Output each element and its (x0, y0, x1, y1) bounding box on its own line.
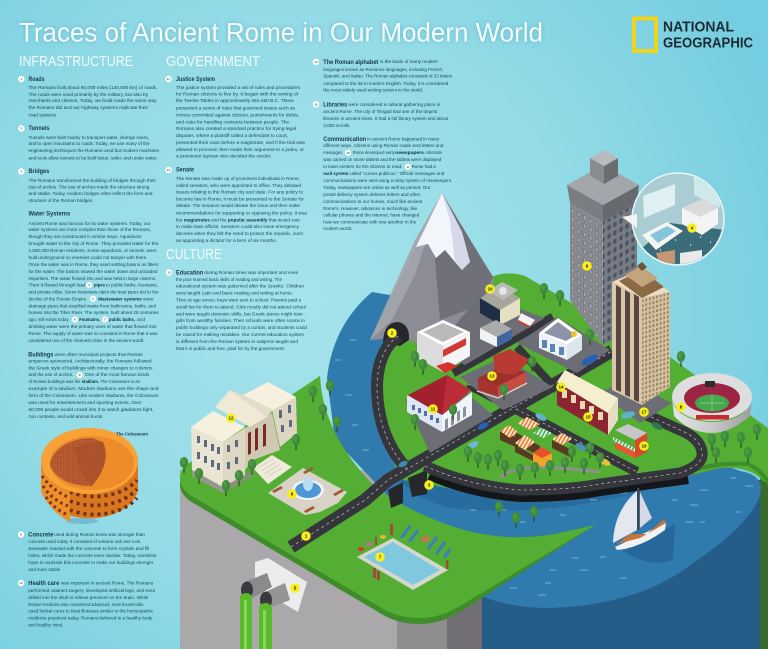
text block: buildings: zoo contests, and wild animal hunts. (28, 414, 104, 419)
text block: education: is different from the Roman system in subjects taught and (176, 339, 299, 344)
building: beige tower (612, 262, 670, 405)
text block: senate: the magistrates and the popular assembly that would vote (176, 218, 301, 222)
text block: justice system: presented a series of rules that governed issues such as (176, 106, 296, 110)
text block: senate: become law in Rome, it must be presented to the Senate for (176, 196, 305, 202)
market stalls (500, 417, 572, 467)
text block: bridges: use of arches. The use of arches made the structure strong (28, 184, 150, 190)
illustration: city map (180, 150, 768, 649)
text block: bridges (18, 168, 157, 203)
text block: water systems: drainage pipes that expelled waste from bathrooms, baths, and (28, 304, 157, 308)
logo: National Geographic (634, 18, 753, 52)
text block: communication: how we communicate with one another in the (323, 220, 417, 224)
label: The Colosseum: The Colosseum (116, 431, 148, 436)
text block: education: public buildings only separated by a curtain, and students could (176, 325, 308, 330)
text block: the Roman alphabet: is the basis of many modern (380, 59, 439, 64)
text block: water systems: considered one of the cleanest cities in the ancient world. (28, 338, 144, 343)
land: city island (380, 273, 768, 495)
illustration: stadium (672, 373, 752, 433)
building: capitol (191, 382, 297, 493)
text block: water systems: to public baths, fountains, (106, 282, 158, 288)
map pins: 17 (641, 410, 647, 415)
text block: communication: cellular phones and the Internet, have changed (323, 212, 420, 218)
tunnel (383, 322, 409, 346)
map pins: 8 (680, 405, 683, 410)
text block: senate: recommendations for supporting or opposing the policy. It was (176, 210, 308, 216)
text block: bridges: The Romans transformed the building of bridges through their (28, 178, 157, 183)
text block: water systems: public baths, (109, 317, 135, 322)
text block: concrete: and more stable. (28, 567, 61, 572)
text block: communication: communications to our homes, much like ancient (323, 199, 423, 204)
text block: concrete: Concrete (28, 532, 54, 539)
text block: communication: in ancient Rome happened in many (367, 136, 440, 142)
pool (357, 524, 450, 590)
text block: buildings: example of a stadium. Modern stadiums use the shape and (28, 386, 159, 391)
text block: communication: Rome's. However, advances in technology, like (323, 206, 418, 211)
text block: tunnels: Tunnels (28, 125, 50, 132)
panel: alphabet, libraries, communication (313, 59, 453, 231)
map pins: 4 (691, 226, 694, 231)
panel: infrastructure (18, 54, 160, 419)
text block: communication: Communication (323, 136, 366, 143)
text block: buildings: and the use of arches. (28, 372, 74, 377)
text block: water systems: impurities. The water flowed into and was held in large cisterns. (28, 276, 156, 281)
map pins: 10 (487, 287, 493, 292)
text block: education: educational system was patterned after the Greeks'. Children (176, 284, 305, 288)
text block: the Roman alphabet: 14 (314, 60, 318, 64)
text block: concrete: used during Roman times was stronger than (54, 532, 146, 537)
text block: water systems: and (137, 317, 146, 322)
text block: education: Education (176, 270, 203, 277)
text block: justice system: The justice system provided a set of rules and procedures (176, 85, 301, 90)
text block: communication (323, 136, 452, 231)
text block: communication: Information (426, 150, 442, 155)
text block: senate: The Senate was made up of prominent individuals in Rome, (176, 176, 300, 181)
text block: justice system: disputes, where a plaintiff called a defendant to court, (176, 133, 288, 138)
panel: culture (166, 247, 308, 351)
text block: education: during Roman times was important and even (204, 270, 299, 275)
text block: health care: performed cataract surgery, developed artificial legs, and even (28, 588, 156, 593)
text block: libraries (313, 101, 449, 128)
text block: health care: drilled into the skull to relieve pressure on the brain. While (28, 595, 149, 600)
text block: justice system: and rules for handling contracts between people. The (176, 120, 290, 124)
map pins: 12 (228, 416, 234, 421)
text block: libraries: were considered a cultural gathering place in (348, 102, 441, 107)
text block: justice system: Romans also created a standard practice for trying legal (176, 126, 296, 131)
text block: justice system: allowed to proceed, then made their argument to a judex, or (176, 147, 305, 152)
text block: buildings: Buildings (28, 351, 54, 358)
water shadow (392, 470, 690, 511)
text block: concrete: holes, which made the concrete even sturdier. Today, scientists (28, 553, 157, 558)
text block: justice system: a prominent layman who decided the verdict. (176, 154, 272, 158)
text block: justice system: 11 (167, 77, 170, 81)
text block: water systems: pipes (94, 282, 105, 288)
text block: bridges: structure of the Roman bridges. (28, 198, 94, 203)
text block: education: girls from wealthy families. Their schools were often rooms in (176, 318, 306, 323)
text block: water systems: decline of the Roman Empire. (28, 296, 88, 302)
icon: yellow rectangle (634, 18, 656, 51)
bridge piers (388, 470, 427, 508)
illustration: bathroom bubble (622, 173, 725, 270)
text block: health care: Health care (28, 580, 60, 587)
text block: roads: 1 (20, 77, 22, 81)
text block: senate: issues relating to the Roman city and state. For any policy to (176, 190, 304, 194)
text block: communication: modern world. (323, 226, 352, 231)
text block: communication: Rome had a (412, 164, 436, 169)
map pins: 1 (305, 534, 308, 539)
text block: the Roman alphabet: compared to the 26 in modern English. Today, it is considered (323, 81, 449, 86)
map pins: 14 (558, 385, 564, 390)
map pins: 15 (585, 415, 591, 420)
text block: communication: communications were sent using a relay system of messengers. (323, 178, 452, 183)
text block: roads: The roads were used primarily by the military, but also by (28, 92, 149, 97)
text block: water systems: Once the water was in Rome, they used settling basins as filters (28, 262, 159, 267)
text block: water systems: 7 (104, 318, 106, 322)
text block: health care: used herbal cures to treat illnesses similar to the homeopathic (28, 608, 154, 614)
map pins: 6 (291, 492, 294, 497)
building: bank (539, 318, 582, 360)
text block: education: and were taught domestic skills, but Greek slaves might tutor (176, 312, 304, 316)
land: front left (180, 376, 595, 624)
text block: bridges: and stable. Today, modern bridges often reflect the form and (28, 191, 153, 196)
water ripples (335, 340, 753, 595)
text block: the Roman alphabet (313, 59, 453, 92)
text block: water systems: and private villas. Some historians claim the lead pipes led to the (28, 290, 159, 294)
text block: libraries: 15 (314, 102, 318, 106)
text block: justice system: the Twelve Tables in approximately 451-450 B.C. These (176, 98, 295, 103)
map pins (226, 223, 697, 593)
text block: buildings: were often municipal projects that Roman (55, 352, 143, 357)
text block: health care: and healthy mind. (28, 622, 63, 628)
building: courthouse (407, 375, 472, 432)
text block: water systems: though they are constructed in similar ways. Aqueducts (28, 234, 142, 239)
text block: senate: debate. The senators would debate the issue and then make (176, 203, 300, 208)
text block: libraries: 3,000 scrolls. (323, 123, 350, 128)
text block: communication: different ways. Citizens using Roman roads sent letters and (323, 143, 444, 148)
text block: health care: 10 (19, 581, 23, 585)
text block: bridges: 3 (20, 170, 22, 174)
text block: water systems: Water Systems (28, 211, 71, 218)
text block: health care: was important in ancient Rome. The Romans (61, 580, 154, 585)
panel: government (165, 54, 308, 243)
text block: tunnels: 2 (20, 127, 22, 131)
text block: water systems: 6 (74, 318, 76, 322)
text block: education: small fee for them to attend. Girls mostly did not attend school (176, 304, 306, 310)
text block: senate (165, 167, 308, 243)
text block: water systems: ago, still exists today. (28, 317, 70, 322)
text block: water systems: 5 (92, 297, 94, 301)
map pins: 16 (641, 444, 647, 449)
text block: communication: Rome developed early (353, 150, 395, 155)
text block: communication: 16 (346, 151, 350, 155)
cars (397, 352, 664, 469)
text block: concrete (18, 531, 157, 572)
text block: roads: the Romans did and our highway systems replicate their (28, 105, 149, 110)
text block: roads: merchants and citizens. Today, we build roads the same way (28, 98, 157, 103)
map pins: 2 (391, 331, 394, 336)
text block: water systems: Rome. The supply of water was so constant in Rome that it was (28, 331, 158, 336)
text block: education (166, 269, 308, 351)
illustration: Colosseum (41, 428, 148, 524)
mountain (370, 193, 495, 345)
map pins: 13 (489, 374, 495, 379)
text block: water systems: drinking water were the primary uses of water that flowed into (28, 324, 157, 329)
text block: communication: messages. (323, 150, 343, 155)
building: fire station (417, 320, 470, 373)
text block: communication: Today, newspapers are online as well as printed. Our (323, 185, 431, 190)
text block: water systems: brought water to the city of Rome. They provided water for the (28, 241, 159, 246)
text block: health care (18, 580, 156, 628)
text block: concrete: hope to replicate this concrete to make our buildings stronger (28, 560, 154, 565)
text block: roads: Roads (28, 76, 45, 83)
map pins: 7 (379, 555, 382, 560)
text block: buildings: emperors sponsored. Architecturally, the Romans followed (28, 358, 152, 364)
text block: buildings: 8 (79, 373, 81, 377)
text block: health care: medicine practiced today. Romans believed in a healthy body (28, 616, 153, 620)
text block: senate: 12 (167, 168, 170, 172)
text block: justice system: for Roman citizens to live by. It began with the writing of (176, 92, 299, 96)
map pins: 5 (294, 586, 297, 591)
text block: bridges: Bridges (28, 168, 50, 175)
text block: communication: mail system (323, 171, 348, 176)
text block: water systems: built underground so enemies could not tamper with them. (28, 255, 148, 260)
text block: water systems: 1,000,000 Roman residents. Some aqueducts, or tunnels, were (28, 248, 157, 253)
text block: senate: Senate (176, 167, 194, 174)
heading: culture: CULTURE (166, 247, 222, 263)
logo wordmark: GEOGRAPHIC (663, 34, 753, 52)
text block: water systems: homes into the Tiber River. The system, built about 28 centuries (28, 310, 159, 315)
text block: water systems: were (143, 296, 154, 302)
text block: roads: road systems. (28, 112, 58, 118)
land: right bank edge (687, 462, 768, 486)
text block: communication: was carved on stone tablets and the tablets were displayed (323, 157, 442, 162)
text block: justice system: presented their case before a magistrate, and if the trial was (176, 140, 306, 145)
text block: water systems (28, 211, 159, 343)
building: tower (567, 150, 639, 345)
building: hospital (480, 282, 535, 347)
text block: water systems: Ancient Rome was famous for its water systems. Today, our (28, 221, 151, 226)
text block: tunnels (18, 125, 160, 160)
text block: education: that it is public and free, paid for by the government. (176, 346, 285, 351)
water: river and bay (327, 292, 761, 608)
text block: education: be caned for making mistakes. Our current education system (176, 332, 304, 337)
text block: senate: to make laws official. Senators could also issue emergency (176, 224, 300, 229)
plaza with fountain (268, 467, 347, 515)
logo wordmark (663, 18, 753, 52)
text block: justice system: Justice System (176, 76, 215, 83)
trees (180, 283, 761, 528)
logo wordmark: NATIONAL (663, 18, 734, 36)
text block: senate: called senators, who were appointed to office. They debated (176, 183, 302, 188)
text block: buildings: of Roman buildings was the stadium. The Colosseum is an (28, 379, 140, 384)
text block: the Roman alphabet: The Roman alphabet (323, 59, 379, 66)
text block: tunnels: Tunnels were built mainly to transport water, diverge rivers, (28, 135, 149, 140)
text block: concrete: 9 (20, 533, 22, 537)
text block: libraries: libraries in ancient times. It had a full library system and about (323, 116, 449, 121)
text block: justice system: crimes committed against citizens, punishments for debts, (176, 112, 299, 118)
building: brick market hall (557, 370, 618, 435)
text block: education: were taught Latin and basic reading and writing at home. (176, 290, 293, 296)
text block: senate: decrees when they felt the need to protect the republic, such (176, 231, 304, 236)
text block: libraries: ancient Rome. The city of Timgad had one of the largest (323, 109, 438, 114)
text block: communication: called "cursus publicus." Official messages and (349, 171, 445, 176)
text block: water systems: for the water. The basins slowed the water down and unloaded (28, 269, 158, 274)
path in park (500, 467, 600, 478)
sailboat (613, 488, 675, 563)
text block: buildings: the Greek style of buildings with minor changes to columns (28, 366, 153, 370)
text block: roads (18, 76, 157, 118)
building: shop (613, 424, 647, 458)
text block: libraries: Libraries (323, 101, 348, 108)
building: school (477, 349, 530, 398)
text block: buildings: form of the Colosseum. Like modern stadiums, the Colosseum (28, 393, 159, 398)
text block: education: Then at age seven, boys were sent to school. Parents paid a (176, 298, 302, 302)
text block: tunnels: and to open mountains to roads. Today, we use many of the (28, 141, 150, 146)
text block: tunnels: engineering techniques the Romans used but modern machines (28, 148, 160, 153)
text block: the Roman alphabet: Spanish, and Italian. The Roman alphabet consisted of 23 letters (323, 74, 453, 78)
text block: water systems: Wastewater systems (98, 296, 142, 302)
heading: government: GOVERNMENT (166, 54, 260, 70)
text block: buildings: was used for entertainment and sporting events. Over (28, 400, 142, 405)
plazas (405, 295, 672, 453)
drain pipes (240, 558, 307, 649)
text block: justice system (165, 76, 306, 158)
text block: tunnels: and tools allow tunnels to be built faster, safer, and under water. (28, 156, 158, 160)
text block: concrete: Seawater reacted with the concrete to form crystals and fill (28, 546, 149, 551)
text block: the Roman alphabet: languages known as Romance languages, including French, (323, 67, 443, 72)
title: Traces of Ancient Rome in Our Modern World (19, 18, 543, 48)
cliff (180, 470, 768, 649)
text block: buildings: 60,000 people would crowd into it to watch gladiators fight, (28, 407, 154, 412)
text block: senate: as appointing a dictator for a term of six months. (176, 238, 277, 243)
text block: communication: newspapers. (395, 150, 425, 155)
text block: buildings: One of the most famous kinds (85, 372, 150, 377)
roads (291, 317, 702, 547)
heading: infrastructure: INFRASTRUCTURE (19, 54, 133, 70)
text block: education: the poor learned basic skills of reading and writing. The (176, 277, 282, 282)
text block: roads: The Romans built about 80,000 miles (130,000 km) of roads. (28, 85, 158, 90)
text block: water systems: Fountains, (79, 317, 100, 322)
text block: water systems: water systems are more complex than those of the Romans, (28, 227, 151, 232)
text block: water systems: Then it flowed through lead (28, 282, 86, 288)
text block: communication: 17 (406, 165, 410, 169)
map pins: 3 (428, 483, 431, 488)
text block: communication: postal delivery system delivers letters and other (323, 192, 421, 197)
map pins: 9 (586, 264, 589, 269)
text block: water systems: 4 (88, 283, 90, 287)
text block: buildings (28, 351, 159, 419)
text block: communication: in town centers for the citizens to read. (323, 164, 402, 169)
text block: health care: Roman medicine was considered advanced, most households (28, 602, 144, 607)
text block: education: 13 (167, 271, 171, 275)
map pins: 11 (431, 407, 436, 412)
text block: the Roman alphabet: the most widely used writing system in the world. (323, 88, 423, 92)
text block: concrete: concrete used today. It consisted of volcanic ash and rock. (28, 539, 141, 544)
